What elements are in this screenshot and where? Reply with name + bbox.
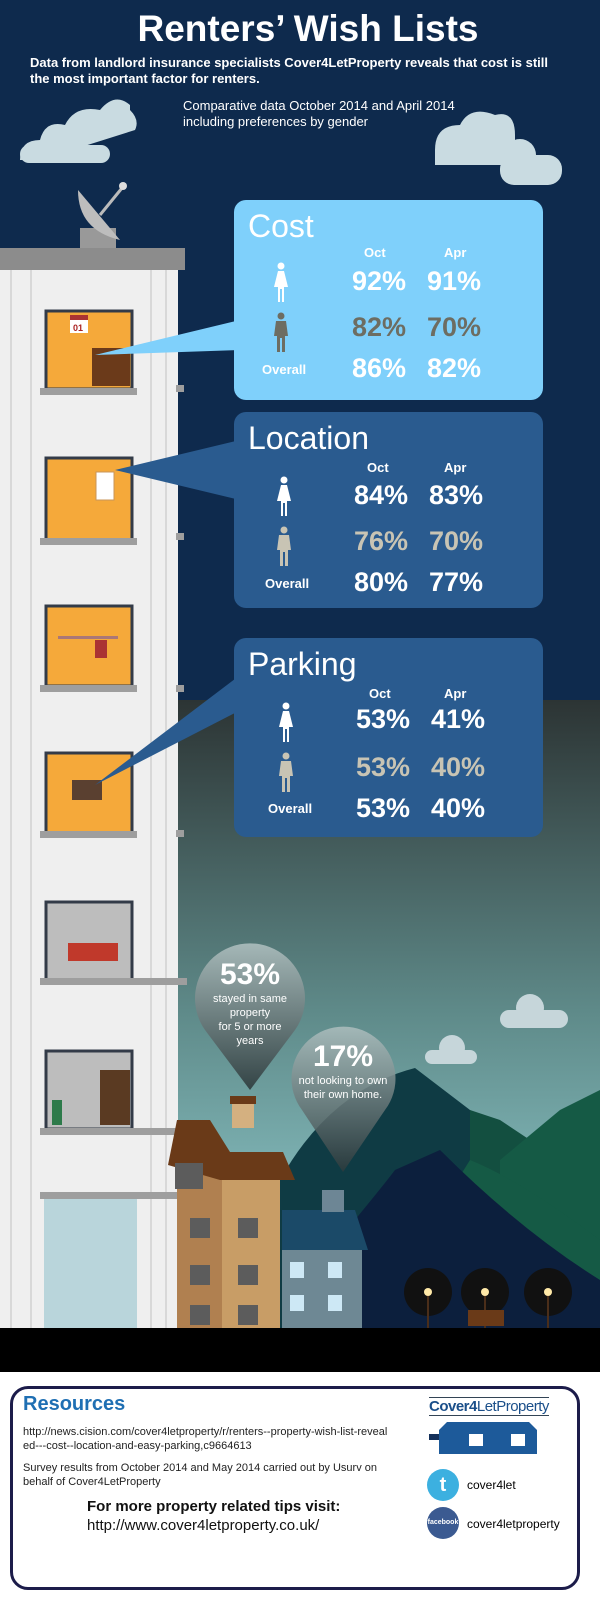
panel: cost: 82% xyxy=(352,312,406,342)
panel: location: 77% xyxy=(429,567,483,597)
twitter: t xyxy=(440,1474,446,1496)
title: Renters’ Wish Lists xyxy=(138,8,478,49)
pin: 53%: stayed in same property xyxy=(213,993,287,1019)
panel: location xyxy=(234,412,543,608)
panel: cost: Apr xyxy=(444,245,466,260)
panel: cost: Oct xyxy=(364,245,386,260)
building xyxy=(0,248,187,1330)
pin: 17%: not looking to own xyxy=(299,1075,387,1087)
logo xyxy=(429,1397,550,1454)
resources box xyxy=(10,1386,580,1590)
clouds xyxy=(20,100,137,160)
satellite dish xyxy=(78,182,127,250)
panel: location: 70% xyxy=(429,526,483,556)
panel: parking: 40% xyxy=(431,752,485,782)
lamps xyxy=(404,1268,572,1316)
pin: 53% xyxy=(213,958,287,1047)
panel: cost: Cost xyxy=(248,208,314,244)
panel: location: Overall xyxy=(265,576,309,591)
panel: location: 80% xyxy=(354,567,408,597)
panel: location: Oct xyxy=(367,460,389,475)
resources box: Survey results from October 2014 and May 2014 carried out by Usurv on behalf of Cover4LetProperty xyxy=(23,1462,377,1488)
panel: parking: 53% xyxy=(356,752,410,782)
resources box: For more property related tips visit: xyxy=(87,1498,340,1515)
panel: parking: Apr xyxy=(444,686,466,701)
panel: location: 83% xyxy=(429,480,483,510)
panel: cost: 82% xyxy=(427,353,481,383)
panel: cost: 92% xyxy=(352,266,406,296)
pin: 53%: 53% xyxy=(220,958,280,991)
icon: female xyxy=(277,476,291,516)
panel: location: 84% xyxy=(354,480,408,510)
pin: 53%: for 5 or more xyxy=(219,1021,281,1033)
panel: parking: 40% xyxy=(431,793,485,823)
panel: parking: 53% xyxy=(356,793,410,823)
houses xyxy=(168,1096,368,1330)
resources box: cover4letproperty xyxy=(467,1517,560,1531)
logo: Cover4LetProperty xyxy=(429,1398,549,1415)
pin: 53%: years xyxy=(237,1035,263,1047)
panel: parking: Overall xyxy=(268,801,312,816)
mountains xyxy=(280,1068,600,1330)
panel: cost xyxy=(234,200,543,400)
resources box: Resources xyxy=(23,1393,125,1415)
pin: 17%: 17% xyxy=(313,1040,373,1073)
icon: female xyxy=(279,702,293,742)
panel: location: 76% xyxy=(354,526,408,556)
facebook: facebook xyxy=(428,1519,458,1526)
icon: female xyxy=(274,262,288,302)
panel: parking xyxy=(234,638,543,837)
twitter xyxy=(427,1469,459,1501)
panel: location: Apr xyxy=(444,460,466,475)
building: 01 xyxy=(73,323,83,333)
resources box: http://www.cover4letproperty.co.uk/ xyxy=(87,1517,319,1534)
panel: cost: Overall xyxy=(262,362,306,377)
subtitle: Data from landlord insurance specialists Cover4LetProperty reveals that cost is still the most important factor for renters. xyxy=(30,55,548,86)
panel: parking: 53% xyxy=(356,704,410,734)
black band xyxy=(0,1328,600,1372)
comparative note: Comparative data October 2014 and April 2014 including preferences by gender xyxy=(183,98,455,129)
facebook xyxy=(427,1507,459,1539)
panel: parking: Oct xyxy=(369,686,391,701)
callout connectors xyxy=(95,322,234,785)
panel: cost: 70% xyxy=(427,312,481,342)
pin: 17%: their own home. xyxy=(304,1089,382,1101)
pins xyxy=(195,943,305,1090)
icon: male xyxy=(279,752,293,792)
panel: parking: 41% xyxy=(431,704,485,734)
panel: cost: 91% xyxy=(427,266,481,296)
resources box: http://news.cision.com/cover4letproperty/r/renters--property-wish-list-revealed---cost--location-and-easy-parking,c9664613 xyxy=(23,1426,387,1452)
pin: 17% xyxy=(299,1040,387,1101)
panel: location: Location xyxy=(248,420,369,456)
icon: male xyxy=(277,526,291,566)
icon: male xyxy=(274,312,288,352)
resources box: cover4let xyxy=(467,1478,516,1492)
panel: parking: Parking xyxy=(248,646,356,682)
panel: cost: 86% xyxy=(352,353,406,383)
